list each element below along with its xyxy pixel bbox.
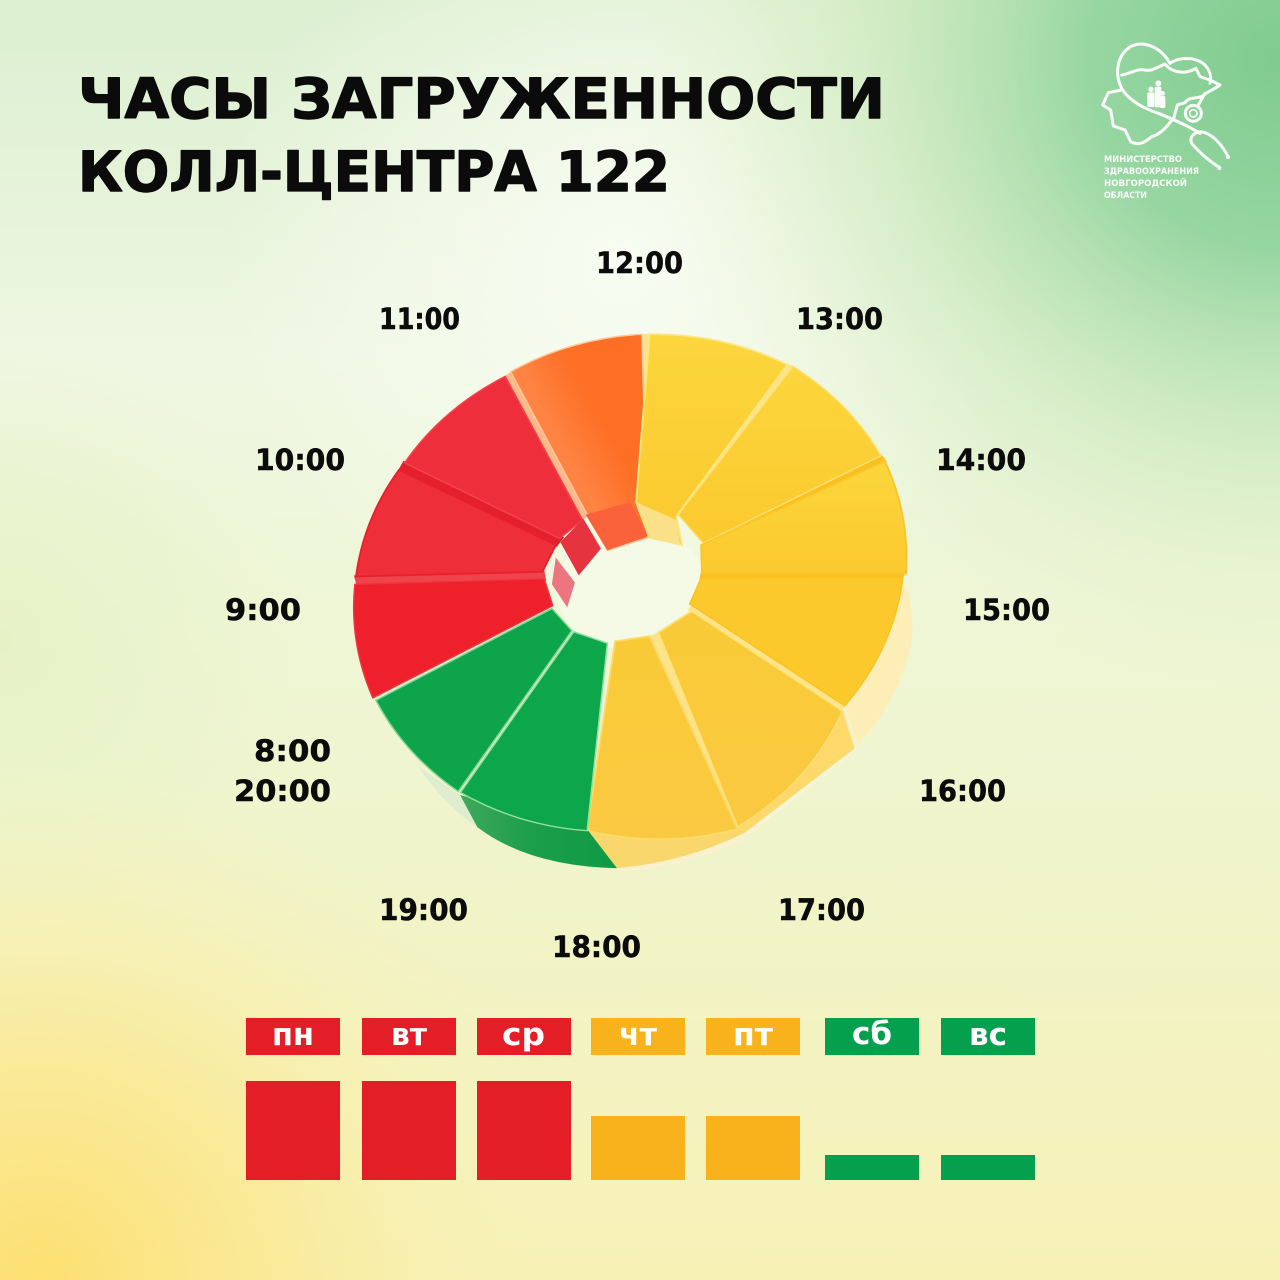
time labels around the wheel xyxy=(225,246,1050,964)
segment 19:00 green body side xyxy=(460,795,617,868)
segment 15:00 yellow xyxy=(690,577,903,706)
translucent body of the wheel xyxy=(418,577,912,872)
time labels around the wheel: 16:00 xyxy=(919,774,1006,808)
backing seen between segments xyxy=(354,334,906,829)
monday: пн xyxy=(272,1017,314,1053)
segment 9:30 red xyxy=(356,470,556,576)
segment 19:00 green xyxy=(460,632,607,831)
time labels around the wheel: 12:00 xyxy=(596,246,683,280)
logo caption: НОВГОРОДСКОЙ xyxy=(1104,177,1187,189)
title xyxy=(78,67,885,204)
time labels around the wheel: 17:00 xyxy=(778,893,865,927)
time labels around the wheel: 15:00 xyxy=(963,593,1050,627)
sunday: вс xyxy=(969,1017,1007,1053)
tuesday xyxy=(362,1017,456,1180)
time labels around the wheel: 11:00 xyxy=(379,302,460,336)
segment 12:00 orange xyxy=(511,334,648,550)
time labels around the wheel: 19:00 xyxy=(379,893,468,927)
title: КОЛЛ-ЦЕНТРА 122 xyxy=(78,140,670,204)
logo caption: ЗДРАВООХРАНЕНИЯ xyxy=(1104,167,1199,177)
time labels around the wheel: 14:00 xyxy=(936,443,1026,477)
thursday: чт xyxy=(619,1017,657,1053)
segment 14:30 yellow xyxy=(701,461,906,574)
segment 20:00 green xyxy=(376,609,572,791)
thursday xyxy=(591,1017,685,1180)
friday: пт xyxy=(733,1017,773,1053)
sunday xyxy=(941,1017,1035,1180)
wednesday xyxy=(477,1017,571,1180)
segment 16:00 yellow xyxy=(658,611,854,832)
icon: heart, region outline and stethoscope xyxy=(1103,44,1230,170)
time labels around the wheel: 9:00 xyxy=(225,593,301,627)
saturday xyxy=(825,1016,919,1180)
segment 9:00 red xyxy=(354,579,553,698)
tuesday: вт xyxy=(391,1017,427,1053)
centre hole highlight xyxy=(556,529,709,650)
segment 13:00 yellow xyxy=(636,334,787,545)
segment 17:00 yellow xyxy=(588,636,738,839)
time labels around the wheel: 20:00 xyxy=(234,774,331,808)
logo caption: МИНИСТЕРСТВО xyxy=(1104,155,1182,165)
wednesday: ср xyxy=(502,1017,545,1053)
monday xyxy=(246,1017,340,1180)
logo caption xyxy=(1104,155,1199,201)
logo caption: ОБЛАСТИ xyxy=(1104,191,1147,201)
friday xyxy=(706,1017,800,1180)
logo: ministry of health xyxy=(1103,44,1230,201)
title: ЧАСЫ ЗАГРУЖЕННОСТИ xyxy=(78,67,885,131)
segment 14:00 yellow xyxy=(678,366,881,543)
time labels around the wheel: 8:00 xyxy=(254,734,331,768)
time labels around the wheel: 18:00 xyxy=(552,930,641,964)
saturday: сб xyxy=(852,1016,892,1052)
segment 10:00 red xyxy=(405,376,601,607)
donut chart: call-centre load by hour xyxy=(354,334,912,872)
time labels around the wheel: 13:00 xyxy=(796,302,883,336)
day of week chart: load by weekday xyxy=(246,1016,1035,1180)
time labels around the wheel: 10:00 xyxy=(255,443,345,477)
